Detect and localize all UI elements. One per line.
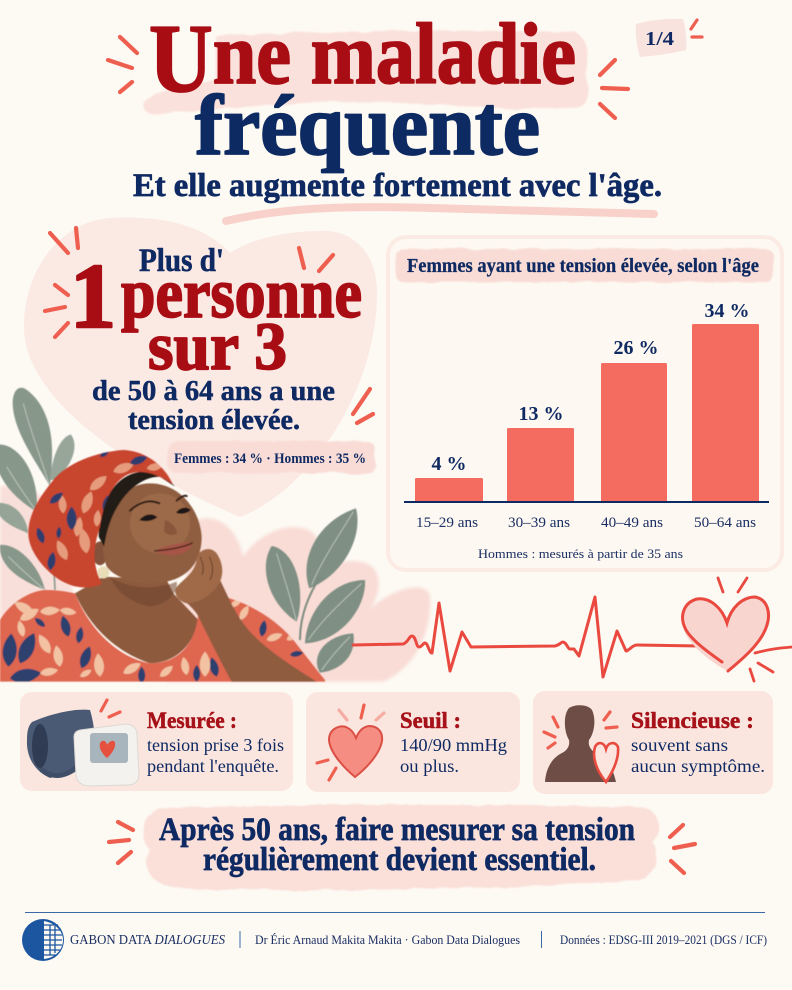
bar 15-29 — [415, 453, 483, 531]
big figure 1: 1 — [70, 245, 116, 347]
data source: Données : EDSG-III 2019–2021 (DGS / ICF) — [560, 932, 767, 947]
card background — [306, 692, 520, 792]
big figure personne: personne — [121, 255, 362, 333]
lead in text: Plus d' — [139, 243, 224, 279]
eyes — [139, 508, 191, 521]
nose — [164, 520, 177, 535]
title brush highlight — [143, 31, 588, 114]
pink blob right — [167, 518, 430, 682]
ecg trace — [353, 597, 700, 677]
bar 40-49 — [601, 337, 667, 531]
title line 1: ne maladie — [213, 5, 576, 102]
logo — [22, 919, 64, 961]
author credit: Dr Éric Arnaud Makita Makita · Gabon Data Dialogues — [255, 932, 520, 947]
icon: blood pressure monitor — [27, 700, 139, 786]
card: mesurée — [20, 692, 293, 791]
chart heading band — [396, 249, 773, 282]
bar 40-49: 40–49 ans — [601, 515, 663, 531]
raised arm — [177, 580, 317, 682]
panel: bar chart — [388, 237, 782, 570]
brand name: GABON DATA DIALOGUES — [70, 933, 225, 948]
callout line 1: Après 50 ans, faire mesurer sa tension — [159, 812, 635, 848]
bar 50-64: 34 % — [704, 300, 750, 322]
face — [103, 483, 202, 583]
card text line 1: souvent sans — [631, 735, 728, 755]
card text line 1: 140/90 mmHg — [400, 735, 507, 755]
head wrap — [28, 450, 173, 587]
heart outline — [683, 597, 768, 671]
card text line 2: aucun symptôme. — [631, 756, 765, 776]
callout — [109, 805, 695, 890]
mouth — [154, 542, 193, 555]
card heading: Silencieuse : — [631, 708, 754, 733]
bar 15-29: 4 % — [432, 453, 466, 475]
bar 30-39: 13 % — [518, 403, 564, 425]
panel: key figure heart — [24, 217, 377, 517]
leaves right — [266, 508, 365, 673]
chart note: Hommes : mesurés à partir de 35 ans — [478, 546, 683, 561]
footer — [22, 912, 767, 961]
bar 50-64 — [692, 300, 759, 531]
face highlight — [130, 493, 190, 553]
bar 15-29: 15–29 ans — [416, 515, 478, 531]
card text line 2: ou plus. — [400, 756, 459, 776]
eyebrows — [130, 496, 187, 511]
card: silencieuse — [533, 691, 773, 794]
chart frame — [388, 237, 782, 570]
neck and chest — [75, 577, 198, 663]
bar 40-49: 26 % — [614, 337, 658, 359]
ear — [93, 541, 107, 565]
card background — [20, 692, 293, 791]
heart sparks — [45, 228, 373, 423]
bar 30-39 — [507, 403, 574, 531]
earring — [97, 566, 109, 578]
subtitle underline stroke — [226, 207, 654, 221]
bar 30-39: 30–39 ans — [508, 515, 570, 531]
card: seuil — [306, 692, 520, 792]
illustration: smiling woman — [0, 450, 325, 685]
bar 50-64: 50–64 ans — [694, 515, 756, 531]
chart heading: Femmes ayant une tension élevée, selon l'âge — [407, 255, 759, 277]
callout sparks — [109, 822, 695, 873]
ecg line with heart — [353, 578, 792, 681]
hair — [99, 471, 175, 547]
background blobs and foliage — [0, 388, 430, 682]
card heading: Seuil : — [400, 708, 461, 733]
chart axis — [404, 501, 769, 503]
icon: heart — [317, 705, 384, 780]
heart background — [24, 217, 377, 517]
title sparks — [108, 37, 628, 118]
card text line 1: tension prise 3 fois — [147, 735, 284, 755]
dress — [0, 590, 325, 685]
page number tag: 1/4 — [645, 28, 674, 50]
title block — [108, 5, 702, 221]
page number tag — [636, 19, 702, 57]
heart fill — [683, 597, 768, 671]
icon: silhouette with heart — [544, 705, 618, 782]
description: de 50 à 64 ans a une — [92, 375, 335, 407]
card background — [533, 691, 773, 794]
chin shadow — [110, 577, 177, 607]
card text line 2: pendant l'enquête. — [147, 756, 279, 776]
finger creases — [200, 557, 212, 580]
heart sparks — [718, 578, 792, 681]
leaves left — [0, 388, 74, 590]
big figure line 2: sur 3 — [148, 308, 287, 384]
statistic pill: Femmes : 34 % · Hommes : 35 % — [174, 451, 366, 467]
card heading: Mesurée : — [147, 708, 237, 733]
subtitle: Et elle augmente fortement avec l'âge. — [133, 168, 662, 204]
description line 2: tension élevée. — [128, 404, 300, 436]
callout line 2: régulièrement devient essentiel. — [203, 842, 596, 878]
title line 2: fréquente — [195, 77, 540, 173]
pink blob left — [0, 485, 73, 620]
callout band — [143, 805, 658, 890]
statistic pill — [168, 441, 375, 473]
hand on chin — [175, 549, 222, 603]
title line 1: U — [149, 5, 213, 113]
